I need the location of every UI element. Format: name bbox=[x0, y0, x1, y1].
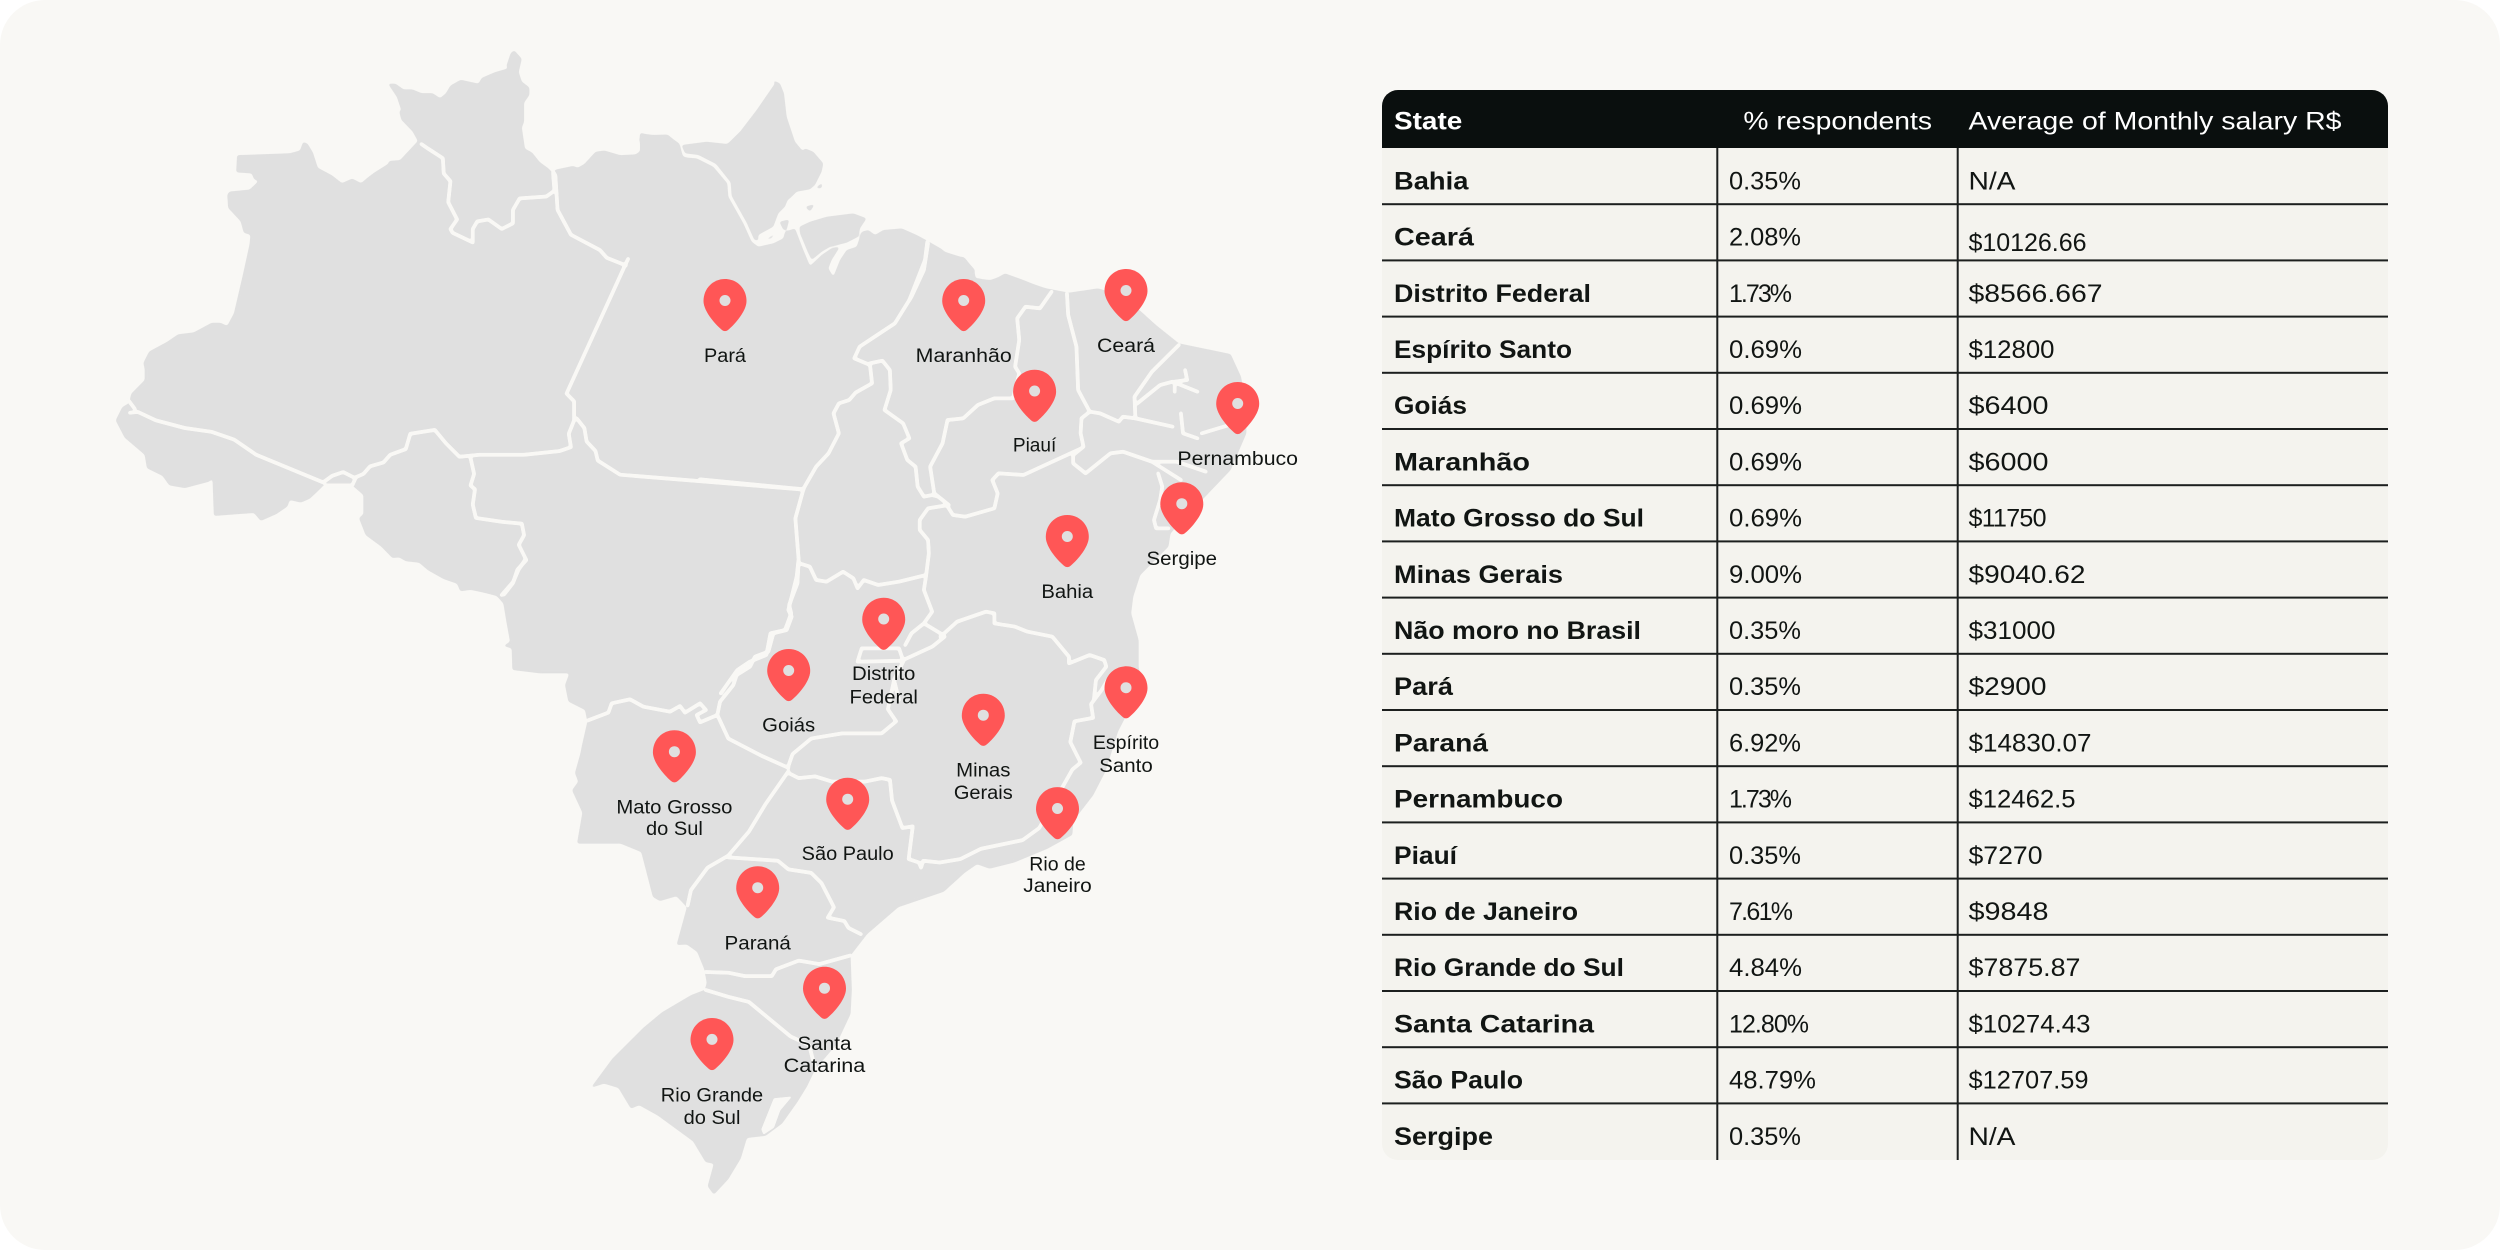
row: Santa Catarina: Santa Catarina bbox=[1394, 1010, 1595, 1038]
pin and label: Piauí bbox=[1013, 370, 1057, 457]
pin and label: Espírito Santo: Espírito bbox=[1093, 733, 1159, 754]
pin and label: Pará: Pará bbox=[704, 346, 746, 367]
row: Rio Grande do Sul: 4.84% bbox=[1729, 954, 1802, 982]
pin and label: Ceará: Ceará bbox=[1097, 336, 1155, 357]
pin and label: Rio de Janeiro: Rio de bbox=[1029, 854, 1086, 875]
row: Espírito Santo bbox=[1394, 336, 2054, 364]
row: Paraná: $14830.07 bbox=[1968, 729, 2092, 757]
pin and label: Minas Gerais: Minas bbox=[956, 760, 1010, 781]
row: Minas Gerais: Minas Gerais bbox=[1394, 561, 1563, 589]
pin and label: Distrito Federal: Federal bbox=[850, 687, 918, 708]
pin and label: Sergipe: Sergipe bbox=[1147, 549, 1217, 570]
row: Minas Gerais bbox=[1394, 561, 2086, 589]
pin and label: Rio de Janeiro: Janeiro bbox=[1023, 876, 1092, 897]
row: Sergipe: N/A bbox=[1968, 1123, 2016, 1151]
row: Goiás bbox=[1394, 392, 2048, 420]
row: Mato Grosso do Sul: Mato Grosso do Sul bbox=[1394, 505, 1644, 533]
row: Rio de Janeiro bbox=[1394, 898, 2048, 926]
row: São Paulo: São Paulo bbox=[1394, 1067, 1523, 1095]
row: Rio Grande do Sul bbox=[1394, 954, 2080, 982]
row: Mato Grosso do Sul: 0.69% bbox=[1729, 505, 1802, 533]
row: Pernambuco bbox=[1394, 786, 2076, 814]
pin and label: Pernambuco: Pernambuco bbox=[1177, 449, 1298, 470]
row: Maranhão: $6000 bbox=[1968, 448, 2048, 476]
pin and label: Paraná: Paraná bbox=[725, 933, 791, 954]
row: Rio Grande do Sul: $7875.87 bbox=[1968, 954, 2080, 982]
row: Piauí: 0.35% bbox=[1729, 842, 1801, 870]
row: Paraná: Paraná bbox=[1394, 729, 1488, 757]
row: Distrito Federal bbox=[1394, 280, 2102, 308]
pin and label: Goiás bbox=[762, 649, 815, 737]
pin and label: Santa Catarina: Catarina bbox=[784, 1056, 866, 1077]
table header: Average of Monthly salary R$ bbox=[1968, 107, 2342, 135]
row: Não moro no Brasil: 0.35% bbox=[1729, 617, 1801, 645]
row: Distrito Federal: $8566.667 bbox=[1968, 280, 2102, 308]
map: Brazil states bbox=[116, 50, 1246, 1195]
row: Minas Gerais: $9040.62 bbox=[1968, 561, 2086, 589]
pin and label: Maranhão: Maranhão bbox=[916, 346, 1012, 367]
row: Espírito Santo: Espírito Santo bbox=[1394, 336, 1572, 364]
row: Santa Catarina: $10274.43 bbox=[1968, 1010, 2090, 1038]
pin and label: Rio Grande do Sul: Rio Grande bbox=[661, 1086, 763, 1106]
row: Rio de Janeiro: 7.61% bbox=[1729, 898, 1793, 926]
row: Não moro no Brasil bbox=[1394, 617, 2056, 645]
row: Goiás: $6400 bbox=[1968, 392, 2048, 420]
table header: % respondents bbox=[1743, 107, 1932, 135]
pin and label: Rio Grande do Sul bbox=[661, 1018, 763, 1129]
pin and label: Goiás: Goiás bbox=[762, 716, 815, 737]
row: Paraná bbox=[1394, 729, 2092, 757]
row: Sergipe: Sergipe bbox=[1394, 1123, 1493, 1151]
row: Espírito Santo: 0.69% bbox=[1729, 336, 1802, 364]
row: Bahia: 0.35% bbox=[1729, 167, 1801, 195]
pin and label: Santa Catarina bbox=[784, 967, 866, 1077]
row: São Paulo: $12707.59 bbox=[1968, 1067, 2088, 1095]
pin and label: Bahia bbox=[1041, 515, 1094, 603]
row: Bahia bbox=[1394, 167, 2016, 195]
row: Santa Catarina: 12.80% bbox=[1729, 1010, 1809, 1038]
row: Minas Gerais: 9.00% bbox=[1729, 561, 1802, 589]
pin and label: Bahia: Bahia bbox=[1041, 582, 1094, 603]
pin and label: Mato Grosso do Sul: do Sul bbox=[646, 819, 703, 840]
pin and label: Rio Grande do Sul: do Sul bbox=[684, 1108, 740, 1129]
table: respondents and salary by state bbox=[1382, 90, 2388, 1160]
pin and label: Minas Gerais: Gerais bbox=[954, 783, 1013, 804]
row: Mato Grosso do Sul bbox=[1394, 505, 2046, 533]
pin and label: Piauí: Piauí bbox=[1013, 436, 1057, 457]
table header: State bbox=[1394, 107, 1462, 135]
row: Mato Grosso do Sul: $11750 bbox=[1968, 505, 2046, 533]
row: Rio de Janeiro: $9848 bbox=[1968, 898, 2048, 926]
row: Pará bbox=[1394, 673, 2046, 701]
row: Paraná: 6.92% bbox=[1729, 729, 1801, 757]
pin and label: Pará bbox=[704, 279, 746, 367]
row: São Paulo: 48.79% bbox=[1729, 1067, 1816, 1095]
row: Sergipe bbox=[1394, 1123, 2016, 1151]
pin and label: Mato Grosso do Sul: Mato Grosso bbox=[616, 797, 732, 818]
pin and label: Espírito Santo: Santo bbox=[1099, 756, 1153, 777]
row: Pernambuco: Pernambuco bbox=[1394, 786, 1563, 814]
pin and label: São Paulo bbox=[802, 778, 894, 865]
row: Ceará: $10126.66 bbox=[1968, 229, 2086, 257]
row: Ceará: 2.08% bbox=[1729, 224, 1801, 252]
row: Goiás: 0.69% bbox=[1729, 392, 1802, 420]
pin and label: Distrito Federal: Distrito bbox=[852, 664, 915, 685]
pin and label: Santa Catarina: Santa bbox=[798, 1034, 852, 1055]
row: Pará: $2900 bbox=[1968, 673, 2046, 701]
row: Sergipe: 0.35% bbox=[1729, 1123, 1801, 1151]
row: Pará: 0.35% bbox=[1729, 673, 1801, 701]
pin and label: Pernambuco bbox=[1177, 382, 1298, 470]
row: Maranhão: 0.69% bbox=[1729, 448, 1802, 476]
row: Pará: Pará bbox=[1394, 673, 1453, 701]
pin and label: Ceará bbox=[1097, 269, 1155, 357]
row: Ceará: Ceará bbox=[1394, 224, 1474, 252]
row: Pernambuco: $12462.5 bbox=[1968, 786, 2076, 814]
row: Ceará bbox=[1394, 224, 2086, 257]
row: Santa Catarina bbox=[1394, 1010, 2090, 1038]
row: Goiás: Goiás bbox=[1394, 392, 1467, 420]
row: São Paulo bbox=[1394, 1067, 2088, 1095]
row: Distrito Federal: Distrito Federal bbox=[1394, 280, 1591, 308]
row: Espírito Santo: $12800 bbox=[1968, 336, 2054, 364]
pin and label: Paraná bbox=[725, 866, 791, 954]
row: Maranhão bbox=[1394, 448, 2048, 476]
row: Bahia: Bahia bbox=[1394, 167, 1470, 195]
row: Piauí: Piauí bbox=[1394, 842, 1458, 870]
row: Piauí: $7270 bbox=[1968, 842, 2042, 870]
pin and label: Mato Grosso do Sul bbox=[616, 730, 732, 840]
row: Bahia: N/A bbox=[1968, 167, 2016, 195]
row: Rio de Janeiro: Rio de Janeiro bbox=[1394, 898, 1578, 926]
pin and label: Espírito Santo bbox=[1093, 666, 1159, 777]
pin and label: Distrito Federal bbox=[850, 598, 918, 708]
pin and label: São Paulo: São Paulo bbox=[802, 844, 894, 865]
row: Pernambuco: 1.73% bbox=[1729, 786, 1792, 814]
row: Rio Grande do Sul: Rio Grande do Sul bbox=[1394, 954, 1624, 982]
row: Não moro no Brasil: $31000 bbox=[1968, 617, 2056, 645]
pin and label: Maranhão bbox=[916, 279, 1012, 367]
row: Piauí bbox=[1394, 842, 2042, 870]
pin and label: Sergipe bbox=[1147, 482, 1217, 570]
row: Maranhão: Maranhão bbox=[1394, 448, 1530, 476]
row: Distrito Federal: 1.73% bbox=[1729, 280, 1792, 308]
pin and label: Rio de Janeiro bbox=[1023, 787, 1092, 897]
pin and label: Minas Gerais bbox=[954, 694, 1013, 804]
table header bbox=[1382, 90, 2388, 148]
row: Não moro no Brasil: Não moro no Brasil bbox=[1394, 617, 1641, 645]
